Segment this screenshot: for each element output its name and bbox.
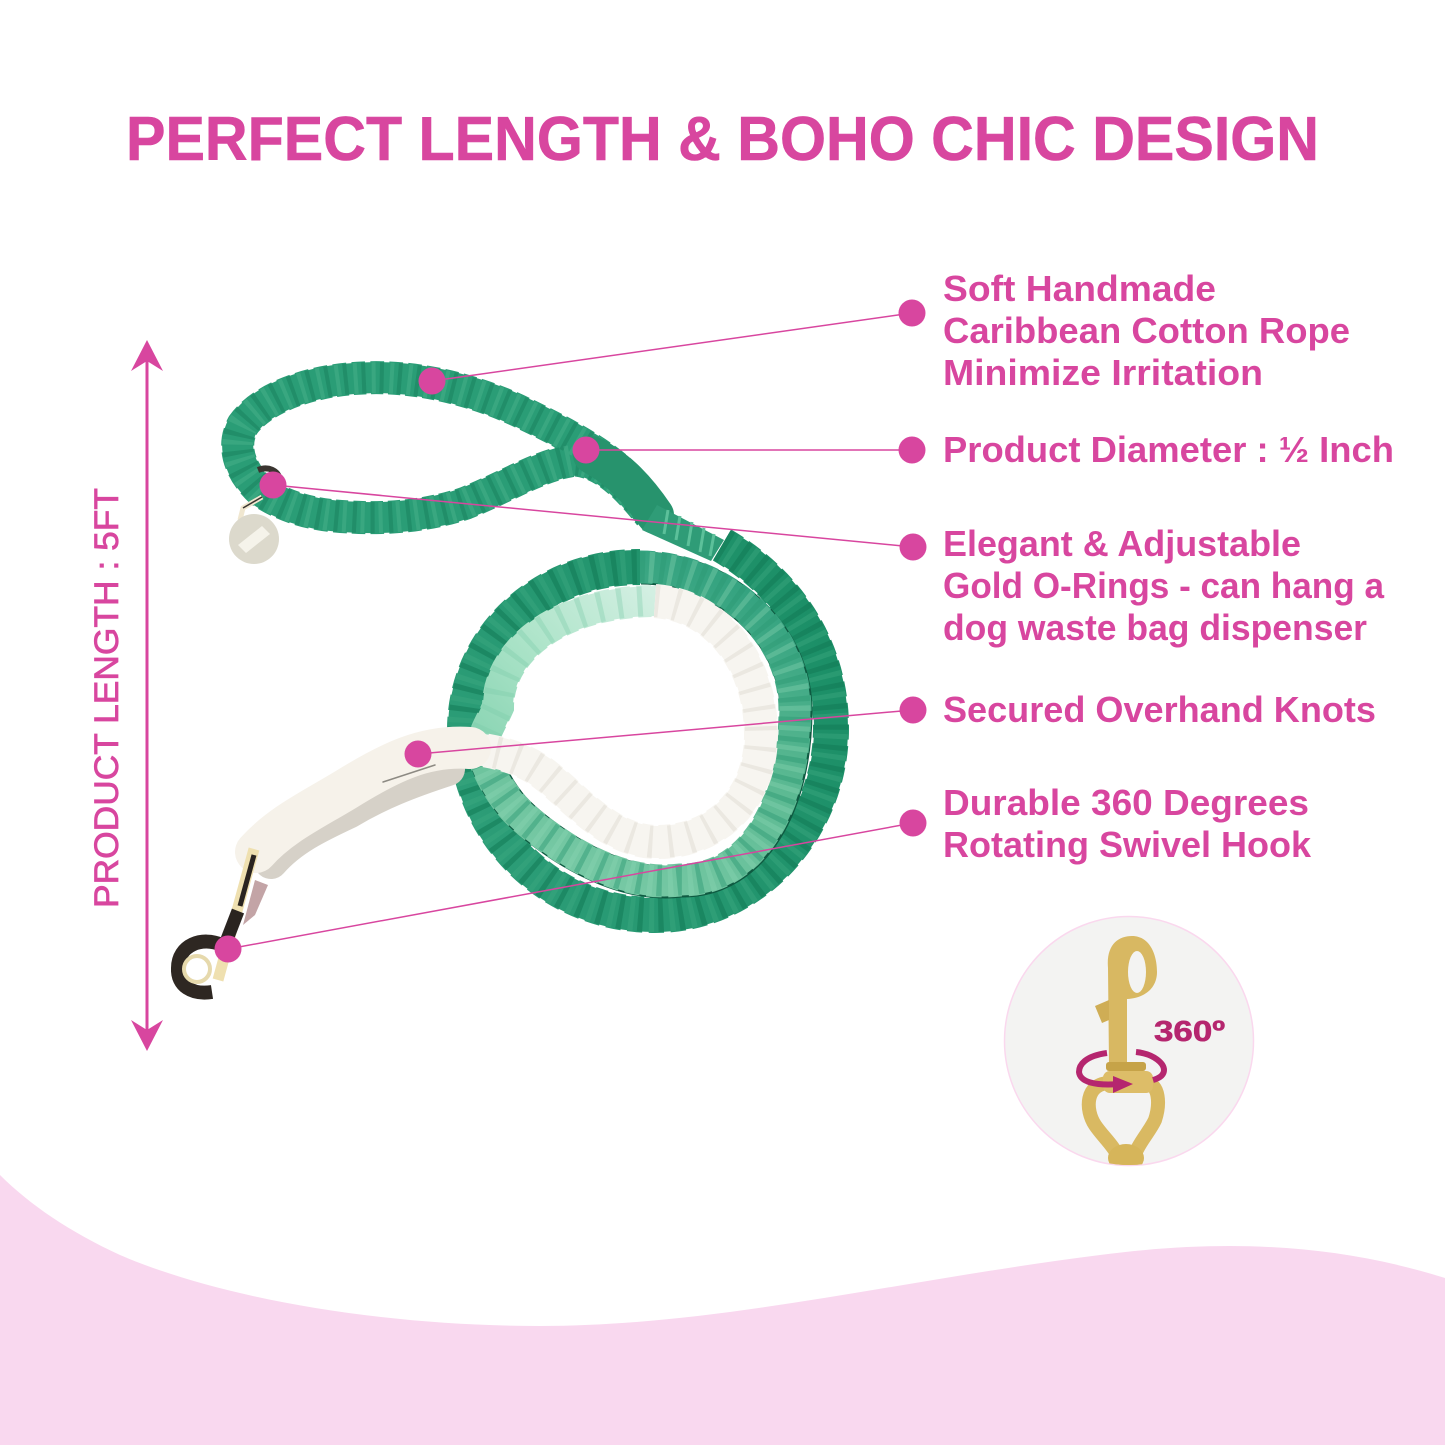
callout: o-rings (260, 472, 926, 560)
rope: outer coil (465, 545, 831, 915)
text: o-rings (943, 523, 1385, 648)
text: o-rings: Gold O-Rings - can hang a (943, 565, 1385, 606)
callout: knots (404, 696, 926, 768)
swivel hook (178, 849, 268, 993)
gold O-ring (240, 468, 280, 520)
length arrow (131, 340, 163, 1051)
text: cotton rope (943, 268, 1350, 393)
round tag (229, 514, 279, 564)
gold swivel eye (1089, 1083, 1158, 1170)
text: cotton rope: Minimize Irritation (943, 352, 1263, 393)
360 degrees label: 360º (1154, 1016, 1225, 1048)
text: cotton rope: Soft Handmade (943, 268, 1216, 309)
callout lines and dots (214, 300, 926, 962)
text: swivel hook (943, 782, 1312, 865)
text: cotton rope: Caribbean Cotton Rope (943, 310, 1350, 351)
callout: diameter (572, 436, 926, 464)
leash photo (178, 378, 831, 993)
gold hook body (1108, 936, 1157, 1065)
background wave (0, 1175, 1445, 1445)
text: o-rings: dog waste bag dispenser (943, 607, 1367, 648)
rope: white coil (470, 601, 761, 842)
rope: light coil (482, 601, 660, 752)
length label: PRODUCT LENGTH : 5FT (88, 488, 126, 908)
text: diameter: Product Diameter : ½ Inch (943, 429, 1394, 470)
rotation arrow (1079, 1052, 1164, 1093)
rope knot (592, 455, 655, 515)
braided white knot (256, 748, 470, 862)
text: swivel hook: Rotating Swivel Hook (943, 824, 1312, 865)
title: PERFECT LENGTH & BOHO CHIC DESIGN (126, 105, 1319, 174)
stitched ribbon (642, 505, 724, 561)
hook detail inset (1004, 916, 1254, 1172)
handle loop (238, 378, 650, 518)
text: knots: Secured Overhand Knots (943, 689, 1376, 730)
text: swivel hook: Durable 360 Degrees (943, 782, 1309, 823)
callout: rope (418, 300, 926, 394)
text: o-rings: Elegant & Adjustable (943, 523, 1301, 564)
callout: hook (214, 810, 926, 962)
rope: middle coil (482, 567, 796, 882)
